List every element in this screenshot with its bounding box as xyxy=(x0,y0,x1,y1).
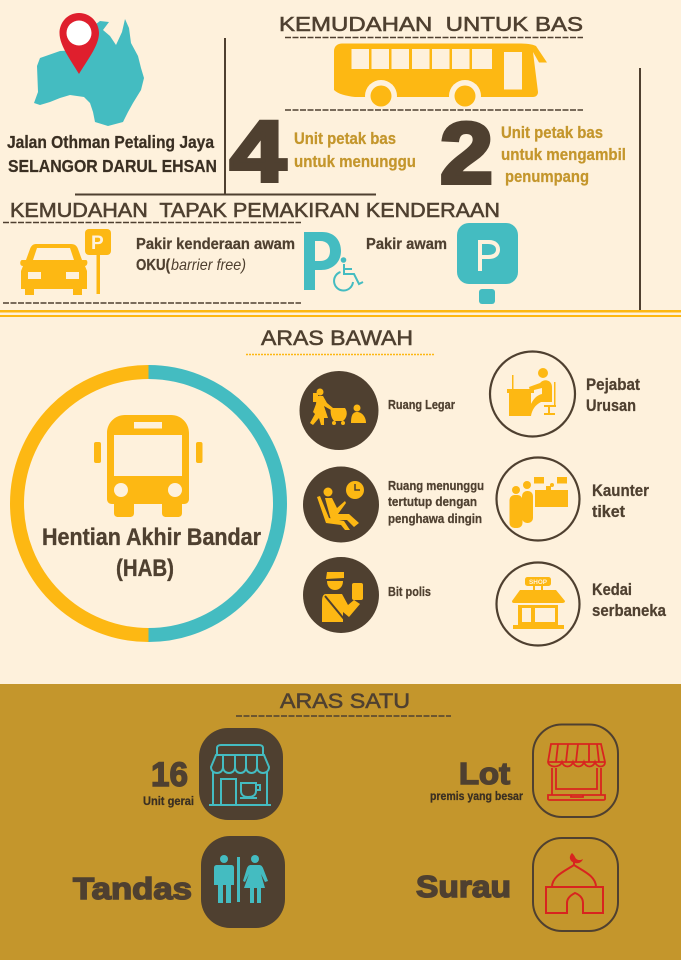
stat: 2 pick-up bays: Unit petak bas xyxy=(501,124,603,142)
text: police post: Bit polis xyxy=(388,585,431,599)
text: waiting room: penghawa dingin xyxy=(388,512,482,526)
stat: 16 shop units: Unit gerai xyxy=(143,796,194,808)
icon: car with parking sign: P xyxy=(91,233,104,254)
text: ticket counter: tiket xyxy=(592,502,625,521)
stat: 4 waiting bays: 4 xyxy=(230,104,286,200)
icon: car with parking sign xyxy=(20,229,111,295)
text: accessible parking: Pakir kenderaan awam xyxy=(136,236,295,253)
icon: convenience store: SHOP xyxy=(529,579,548,586)
text: convenience store xyxy=(592,580,666,620)
icon: lobby xyxy=(300,371,378,450)
heading: parking facilities: KEMUDAHAN TAPAK PEMAKIRAN KENDERAAN xyxy=(10,200,500,222)
text: accessible parking: OKU( xyxy=(136,257,171,274)
heading: bus facilities: KEMUDAHAN UNTUK BAS xyxy=(279,14,583,36)
icon: management office xyxy=(490,352,575,436)
stat: large premises lot xyxy=(430,756,523,803)
text: lobby: Ruang Legar xyxy=(388,398,455,412)
stat: 4 waiting bays xyxy=(230,104,416,200)
icon: cafe shop xyxy=(199,728,283,820)
icon: Australia map with location pin xyxy=(34,13,144,126)
text: prayer room: Surau xyxy=(416,869,511,904)
text: management office xyxy=(586,375,640,415)
stat: 2 pick-up bays: untuk mengambil xyxy=(501,146,626,164)
text: address: SELANGOR DARUL EHSAN xyxy=(8,156,217,176)
text: waiting room: tertutup dengan xyxy=(388,495,477,509)
stat: 4 waiting bays: Unit petak bas xyxy=(294,130,396,148)
text: management office: Urusan xyxy=(586,396,636,415)
icon: accessible parking P with wheelchair xyxy=(304,232,363,290)
stat: 16 shop units: 16 xyxy=(151,756,188,794)
stat: large premises lot: premis yang besar xyxy=(430,791,523,803)
text: address: Jalan Othman Petaling Jaya xyxy=(7,132,214,152)
text: management office: Pejabat xyxy=(586,375,640,394)
text: address xyxy=(7,132,217,176)
icon: side view bus xyxy=(334,44,547,112)
text: waiting room: Ruang menunggu xyxy=(388,479,484,493)
icon: large premises xyxy=(533,724,618,817)
heading: ground floor: ARAS BAWAH xyxy=(261,327,413,350)
text: convenience store: serbaneka xyxy=(592,601,666,620)
panel: terminal ring with bus xyxy=(17,372,280,635)
stat: 2 pick-up bays: 2 xyxy=(440,106,493,202)
stat: large premises lot: Lot xyxy=(459,756,510,791)
icon: front view bus xyxy=(94,415,202,517)
text: terminal name: (HAB) xyxy=(116,555,174,582)
icon: police post xyxy=(303,557,379,633)
stat: 4 waiting bays: untuk menunggu xyxy=(294,153,416,171)
text: accessible parking: barrier free) xyxy=(171,257,246,274)
text: public parking: Pakir awam xyxy=(366,236,447,253)
stat: 2 pick-up bays xyxy=(440,106,626,202)
icon: ticket counter xyxy=(496,458,580,540)
icon: prayer room xyxy=(533,838,618,931)
text: terminal name xyxy=(42,524,261,582)
icon: convenience store xyxy=(496,562,580,646)
icon: toilets xyxy=(201,836,285,928)
stat: 2 pick-up bays: penumpang xyxy=(505,168,589,186)
icon: waiting room xyxy=(303,466,379,542)
text: terminal name: Hentian Akhir Bandar xyxy=(42,524,261,551)
stat: 16 shop units xyxy=(143,756,194,808)
heading: first floor: ARAS SATU xyxy=(280,690,410,713)
text: convenience store: Kedai xyxy=(592,580,632,599)
text: ticket counter xyxy=(592,481,649,521)
text: accessible parking xyxy=(136,236,295,274)
text: waiting room xyxy=(388,479,484,526)
text: toilets: Tandas xyxy=(73,871,192,906)
icon: public parking sign xyxy=(457,223,518,304)
panel: bottom floor band xyxy=(0,684,681,960)
text: ticket counter: Kaunter xyxy=(592,481,649,500)
